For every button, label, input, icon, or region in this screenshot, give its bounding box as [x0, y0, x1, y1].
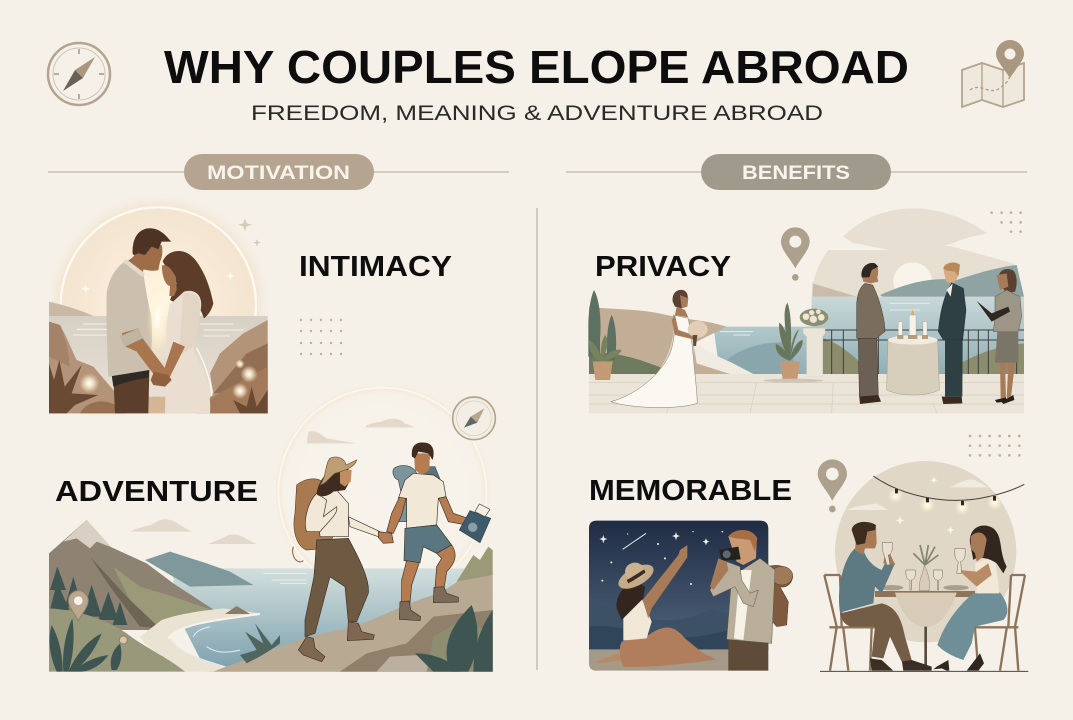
panel: privacy illustration: [588, 208, 1024, 413]
heading: privacy: PRIVACY: [595, 251, 731, 283]
backdrop circle: [812, 208, 1024, 330]
centre light glow: [133, 255, 183, 368]
woman diner: [933, 525, 1007, 671]
heading: adventure: ADVENTURE: [55, 476, 258, 508]
divider: [536, 208, 538, 670]
icon: location pin: [68, 591, 88, 621]
railing: [823, 330, 1024, 374]
table: [875, 545, 975, 671]
floor: [820, 670, 1028, 673]
coastal path: [213, 547, 493, 672]
string lights: [873, 476, 1024, 534]
couple: man: [106, 228, 172, 413]
right rocks: [195, 320, 268, 413]
groom: [857, 263, 885, 404]
left potted plant: [589, 335, 622, 380]
section header: benefits: [566, 154, 1027, 190]
clouds: [131, 419, 415, 544]
panel: adventure illustration: [49, 383, 495, 672]
section header: motivation: MOTIVATION: [207, 163, 350, 184]
hiker: man: [387, 442, 491, 621]
icon: small flower: [119, 636, 127, 644]
cypress trees: [588, 290, 616, 360]
left rocks: [49, 322, 127, 413]
chairs: [824, 575, 1025, 671]
dot pattern: [990, 211, 1022, 233]
heading: intimacy: INTIMACY: [299, 251, 452, 283]
sea: [713, 297, 1024, 374]
icon: compass: [48, 43, 110, 105]
sparkles: [81, 218, 261, 293]
dot pattern: [969, 435, 1021, 457]
icon: map with pin: [962, 40, 1024, 107]
subtitle: FREEDOM, MEANING & ADVENTURE ABROAD: [251, 102, 823, 125]
icon: location pin: [781, 227, 810, 281]
icon: compass: [453, 397, 495, 440]
partner groom: [938, 263, 966, 404]
section header: motivation: [48, 154, 509, 190]
dot pattern: [300, 319, 342, 355]
night sky scene: [589, 521, 768, 671]
hills left: [589, 307, 1024, 374]
hiker: woman: [293, 457, 393, 662]
centre highlight: [147, 283, 168, 353]
foreground leaves left: [50, 618, 123, 672]
heading: memorable: MEMORABLE: [589, 475, 792, 507]
ceremony table with candles: [887, 309, 939, 395]
section header: benefits: BENEFITS: [742, 163, 850, 184]
panel: memorable illustration: [589, 435, 1028, 671]
sea: [173, 568, 493, 672]
terrace floor: [589, 374, 1024, 413]
man diner: [839, 522, 932, 671]
beach and bay: [140, 606, 260, 672]
foreground hill: [49, 608, 185, 672]
mountain: [49, 520, 217, 630]
panel: intimacy illustration: [30, 190, 280, 427]
trees: [50, 567, 127, 625]
photographer: [710, 530, 793, 671]
icon: location pin: [818, 459, 847, 512]
centre potted plant: [763, 303, 823, 383]
bride: [610, 290, 708, 408]
seated woman: [595, 545, 717, 667]
restaurant backdrop circle: [835, 461, 1016, 642]
couple: woman: [162, 251, 213, 413]
officiant: [977, 269, 1022, 404]
far headland: [145, 552, 253, 587]
stone column with flowers: [800, 309, 828, 377]
title: WHY COUPLES ELOPE ABROAD: [164, 41, 909, 93]
